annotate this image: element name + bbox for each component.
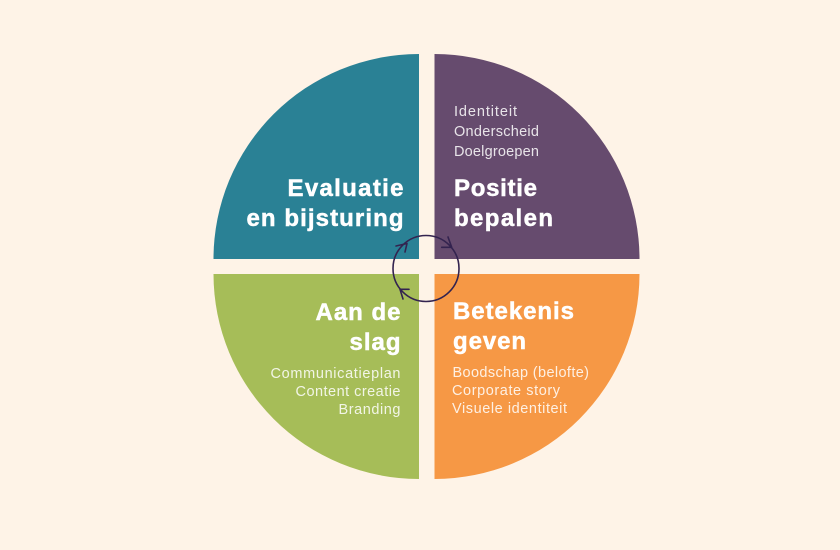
text block: aan de slag items [270, 366, 400, 418]
panel: positie bepalen [434, 54, 640, 259]
heading: betekenis geven [453, 298, 574, 355]
text block: aan de slag items: Communicatieplan [270, 366, 400, 382]
text block: positie items: Onderscheid [454, 124, 539, 140]
heading: betekenis geven: geven [453, 328, 526, 355]
panel: aan de slag [214, 274, 419, 479]
text block: positie items [454, 104, 539, 160]
text block: betekenis items [452, 365, 589, 417]
text block: positie items: Identiteit [454, 104, 517, 120]
heading: aan de slag: slag [350, 329, 400, 356]
heading: positie bepalen: bepalen [454, 205, 553, 232]
text block: betekenis items: Boodschap (belofte) [452, 365, 589, 381]
heading: positie bepalen: Positie [454, 175, 537, 202]
text block: betekenis items: Corporate story [452, 383, 561, 399]
text block: betekenis items: Visuele identiteit [452, 401, 567, 417]
heading: betekenis geven: Betekenis [453, 298, 574, 325]
heading: evaluatie en bijsturing [246, 175, 404, 232]
heading: evaluatie en bijsturing: en bijsturing [246, 205, 404, 232]
heading: aan de slag: Aan de [316, 299, 400, 326]
panel: evaluatie en bijsturing [214, 54, 419, 259]
panel: betekenis geven [434, 274, 640, 479]
text block: positie items: Doelgroepen [454, 144, 539, 160]
text block: aan de slag items: Branding [338, 402, 400, 418]
icon: cycle arrows [393, 236, 459, 302]
heading: aan de slag [316, 299, 400, 356]
heading: evaluatie en bijsturing: Evaluatie [288, 175, 404, 202]
text block: aan de slag items: Content creatie [296, 384, 400, 400]
heading: positie bepalen [454, 175, 553, 232]
